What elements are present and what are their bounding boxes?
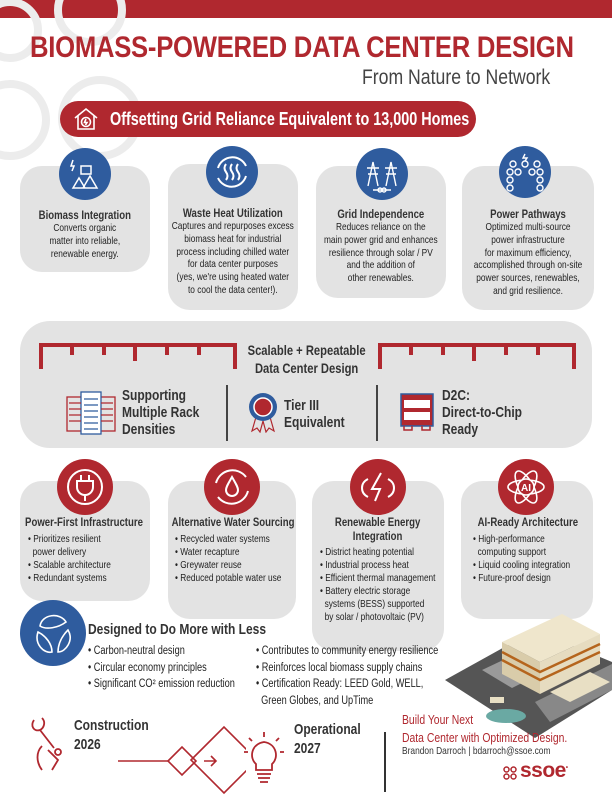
call to action: Build Your Next <box>402 712 473 727</box>
panel: water sourcing: Alternative Water Sourcing <box>172 515 294 529</box>
panel: power-first: • Redundant systems <box>28 573 107 584</box>
icon: water drop <box>204 459 260 515</box>
icon: plug <box>57 459 113 515</box>
item: D2C: Direct-to-Chip <box>442 404 522 421</box>
bullets left <box>88 645 235 690</box>
logo: ssoe: ssoe• <box>520 759 567 782</box>
panel: biomass integration: Biomass Integration <box>39 208 131 222</box>
panel: grid independence: other renewables. <box>348 273 414 284</box>
panel: grid independence: Reduces reliance on the <box>336 222 426 233</box>
icon: recycle leaves <box>20 600 86 666</box>
panel: waste heat <box>168 164 298 310</box>
panel: biomass integration <box>20 166 150 272</box>
panel: renewable integration: • Battery electric storage <box>320 586 410 597</box>
icon: heat cycle <box>206 146 258 198</box>
panel: power pathways: for maximum efficiency, <box>485 248 571 259</box>
panel: waste heat: for data center purposes <box>188 259 278 270</box>
item: D2C: D2C: <box>442 387 470 404</box>
panel: power-first: • Scalable architecture <box>28 560 111 571</box>
icon: AI atom <box>498 459 554 515</box>
item: D2C: Ready <box>442 421 478 438</box>
divider <box>384 732 386 792</box>
panel: renewable integration: by solar / photovoltaic (PV) <box>325 612 424 623</box>
panel: grid independence <box>316 166 446 298</box>
panel: biomass integration: renewable energy. <box>51 249 119 260</box>
panel: biomass integration: Converts organic <box>53 223 116 234</box>
text: operational: 2027 <box>294 740 321 757</box>
item: tier III: Equivalent <box>284 414 345 431</box>
icon: energy leaves <box>350 459 406 515</box>
icon: house <box>74 108 98 130</box>
panel: power pathways: power sources, renewables, <box>476 273 580 284</box>
panel: waste heat: to cool the data center!). <box>188 285 278 296</box>
bullets left: • Circular economy principles <box>88 662 207 674</box>
panel: power-first <box>20 481 150 601</box>
panel: waste heat: biomass heat for industrial <box>184 234 281 245</box>
subtitle: From Nature to Network <box>362 66 550 89</box>
item: rack densities: Supporting <box>122 387 186 404</box>
item: rack densities: Densities <box>122 421 175 438</box>
text: construction: 2026 <box>74 736 101 753</box>
panel: power pathways: Optimized multi-source <box>486 222 570 233</box>
panel: AI-ready: computing support <box>478 547 546 558</box>
panel: renewable integration: Integration <box>353 529 402 543</box>
bracket left <box>39 343 237 369</box>
panel: AI-ready: • Liquid cooling integration <box>473 560 570 571</box>
contact: Brandon Darroch | bdarroch@ssoe.com <box>402 745 550 757</box>
bullets right: Green Globes, and UpTime <box>261 694 373 706</box>
bullets right <box>256 645 438 706</box>
bracket right <box>378 343 576 369</box>
panel: water sourcing: • Greywater reuse <box>175 560 242 571</box>
icon: pathways <box>499 146 551 198</box>
panel: grid independence: main power grid and enhances <box>324 235 438 246</box>
icon: AI atom: AI <box>521 483 531 494</box>
panel: AI-ready: • High-performance <box>473 534 545 545</box>
heading: Data Center Design <box>255 360 358 376</box>
panel: waste heat: Waste Heat Utilization <box>183 206 283 220</box>
panel: power pathways: and grid resilience. <box>493 286 563 297</box>
panel: renewable integration: systems (BESS) supported <box>325 599 424 610</box>
panel: water sourcing: • Water recapture <box>175 547 240 558</box>
panel: water sourcing: • Recycled water systems <box>175 534 270 545</box>
call to action <box>402 712 567 745</box>
icon: light bulb <box>244 732 284 783</box>
panel: waste heat: (yes, we're using heated water <box>177 272 289 283</box>
item: D2C <box>400 387 522 438</box>
panel: renewable integration: Renewable Energy <box>335 515 420 529</box>
panel: power pathways <box>462 166 594 310</box>
panel: AI-ready: • Future-proof design <box>473 573 551 584</box>
panel: renewable integration: • Efficient thermal management <box>320 573 436 584</box>
icon: pylons <box>356 148 408 200</box>
bullets left: • Significant CO² emission reduction <box>88 678 235 690</box>
panel: waste heat: Captures and repurposes excess <box>172 221 294 232</box>
decorative rings <box>0 0 138 160</box>
illustration: building <box>445 614 612 738</box>
panel: power-first: • Prioritizes resilient <box>28 534 101 545</box>
item: tier III <box>249 393 345 433</box>
panel: power pathways: Power Pathways <box>490 207 566 221</box>
bullets left: • Carbon-neutral design <box>88 645 185 657</box>
panel: biomass integration: matter into reliable, <box>49 236 120 247</box>
panel: grid independence: resilience through solar / PV <box>329 248 433 259</box>
text: construction <box>74 717 149 753</box>
text: operational <box>294 721 361 757</box>
bullets right: • Contributes to community energy resilience <box>256 645 438 657</box>
arrow: timeline <box>118 726 246 794</box>
bullets right: • Certification Ready: LEED Gold, WELL, <box>256 678 423 690</box>
panel: grid independence: and the addition of <box>347 260 415 271</box>
panel: power-first: power delivery <box>33 547 86 558</box>
divider <box>226 385 228 441</box>
icon: biomass <box>59 148 111 200</box>
banner: Offsetting Grid Reliance Equivalent to 13,000 Homes <box>110 109 469 129</box>
panel: renewable integration <box>312 481 444 651</box>
heading: do more with less: Designed to Do More with Less <box>88 621 266 638</box>
banner <box>60 101 476 137</box>
panel: power pathways: accomplished through on-site <box>474 260 582 271</box>
panel: water sourcing: • Reduced potable water use <box>175 573 281 584</box>
top red bar <box>0 0 612 18</box>
item: rack densities <box>66 387 200 438</box>
heading: Scalable + Repeatable <box>248 342 366 358</box>
panel: waste heat: process including chilled water <box>176 247 289 258</box>
item: rack densities: Multiple Rack <box>122 404 199 421</box>
divider <box>376 385 378 441</box>
call to action: Data Center with Optimized Design. <box>402 730 567 745</box>
bullets right: • Reinforces local biomass supply chains <box>256 662 422 674</box>
panel: power pathways: power infrastructure <box>491 235 565 246</box>
panel: AI-ready <box>461 481 593 619</box>
text: operational: Operational <box>294 721 361 738</box>
item: tier III: Tier III <box>284 397 319 414</box>
panel: renewable integration: • Industrial process heat <box>320 560 409 571</box>
panel: power-first: Power-First Infrastructure <box>25 515 143 529</box>
panel: renewable integration: • District heating potential <box>320 547 414 558</box>
panel: AI-ready: AI-Ready Architecture <box>478 515 578 529</box>
icon: wrench hand <box>31 717 62 770</box>
panel: water sourcing <box>168 481 296 619</box>
heading <box>248 342 366 376</box>
panel: grid independence: Grid Independence <box>337 207 424 221</box>
panel: scalable design <box>20 321 592 448</box>
text: construction: Construction <box>74 717 149 734</box>
title: BIOMASS-POWERED DATA CENTER DESIGN <box>30 31 574 64</box>
